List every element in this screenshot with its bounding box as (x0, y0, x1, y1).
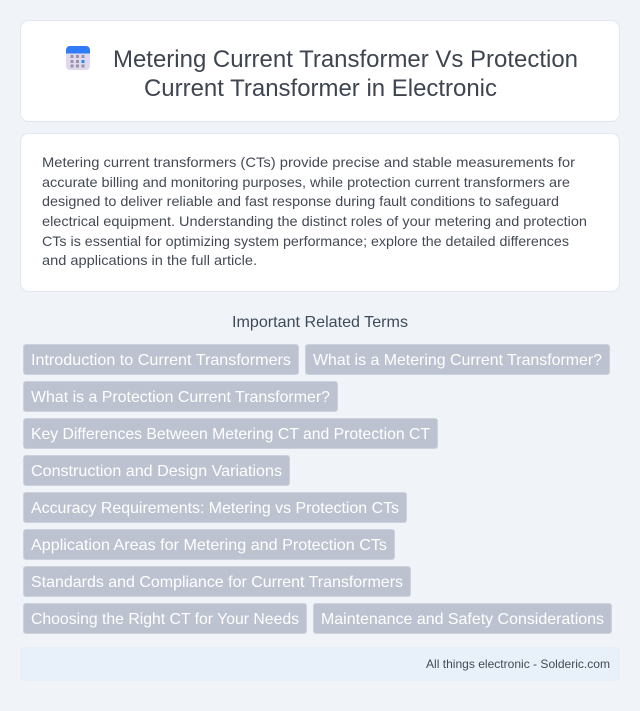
text block: description: CTs is essential for optimizing system performance; explore the detailed differences (42, 233, 569, 249)
tag: metering CT (306, 344, 610, 374)
tag: introduction: Introduction to Current Transformers (31, 352, 291, 369)
panel: title card (20, 20, 620, 122)
tag: standards: Standards and Compliance for Current Transformers (31, 574, 403, 591)
tag list (24, 344, 612, 634)
tag: accuracy: Accuracy Requirements: Metering vs Protection CTs (31, 500, 399, 517)
tag: key differences (24, 418, 438, 448)
text block: description: and applications in the full article. (42, 252, 257, 268)
tag: maintenance: Maintenance and Safety Considerations (321, 611, 604, 628)
tag: construction (24, 456, 290, 486)
text block: description: accurate billing and monitoring purposes, while protection current transformers are (42, 174, 570, 190)
tag: introduction (24, 344, 298, 374)
tag: protection CT: What is a Protection Current Transformer? (31, 389, 330, 406)
tag: maintenance (314, 604, 612, 634)
text block: description: electrical equipment. Understanding the distinct roles of your metering and protection (42, 213, 587, 229)
tag: application: Application Areas for Metering and Protection CTs (31, 537, 387, 554)
tag: choosing: Choosing the Right CT for Your Needs (31, 611, 299, 628)
icon: calendar (66, 46, 90, 70)
heading: important related terms: Important Related Terms (232, 314, 408, 331)
text block: description (42, 154, 587, 268)
tag: application (24, 530, 394, 560)
tag: standards (24, 566, 410, 596)
footer (20, 647, 620, 681)
text block: description: designed to deliver reliable and fast response during fault conditions to safeguard (42, 193, 559, 209)
tag: choosing (24, 604, 306, 634)
text block: description: Metering current transformers (CTs) provide precise and stable measurements for (42, 154, 575, 170)
panel: description (20, 134, 620, 292)
footer: All things electronic - Solderic.com (426, 657, 610, 671)
tag: protection CT (24, 382, 338, 412)
title: Metering Current Transformer Vs Protection (113, 46, 578, 73)
tag: accuracy (24, 492, 406, 522)
tag: metering CT: What is a Metering Current Transformer? (313, 352, 602, 369)
title (113, 46, 578, 102)
title: Current Transformer in Electronic (144, 75, 497, 102)
tag: construction: Construction and Design Variations (31, 463, 282, 480)
tag: key differences: Key Differences Between Metering CT and Protection CT (31, 426, 430, 443)
